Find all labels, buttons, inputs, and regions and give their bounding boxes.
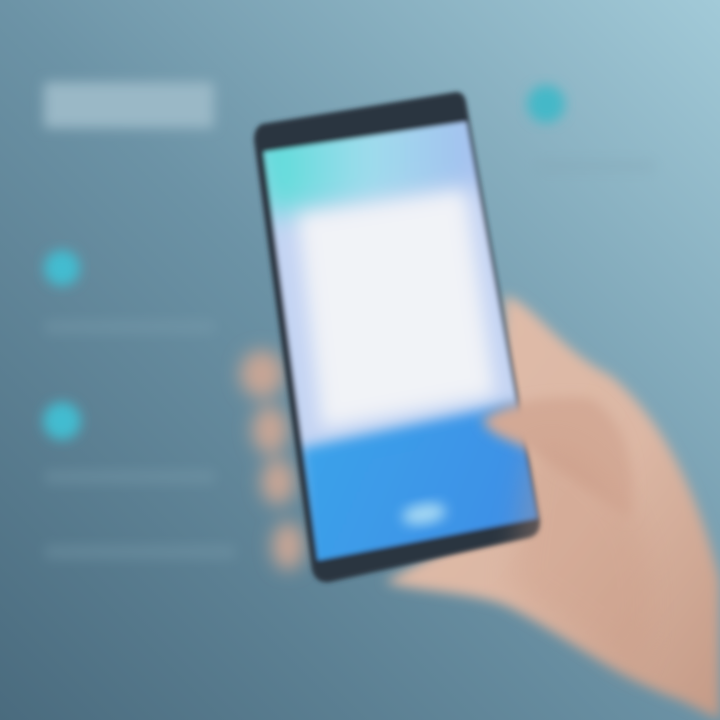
fingers behind phone: [240, 350, 304, 570]
teal dot top right: [527, 85, 565, 123]
phone body: [254, 92, 540, 582]
hand palm: [385, 295, 720, 720]
teal dot left lower: [43, 402, 81, 440]
screen top gradient: [260, 120, 478, 230]
white content card: [298, 190, 495, 428]
palm shadow: [510, 445, 652, 680]
home button glow: [401, 500, 447, 528]
phone: [240, 92, 560, 582]
phone screen layers: [260, 118, 540, 564]
thumb over phone: [482, 397, 633, 520]
blurred heading block: [44, 82, 214, 128]
screen base: [260, 120, 520, 544]
teal dot left upper: [44, 250, 80, 286]
blurred text lines: [45, 160, 655, 559]
screen lower blue: [299, 394, 540, 564]
